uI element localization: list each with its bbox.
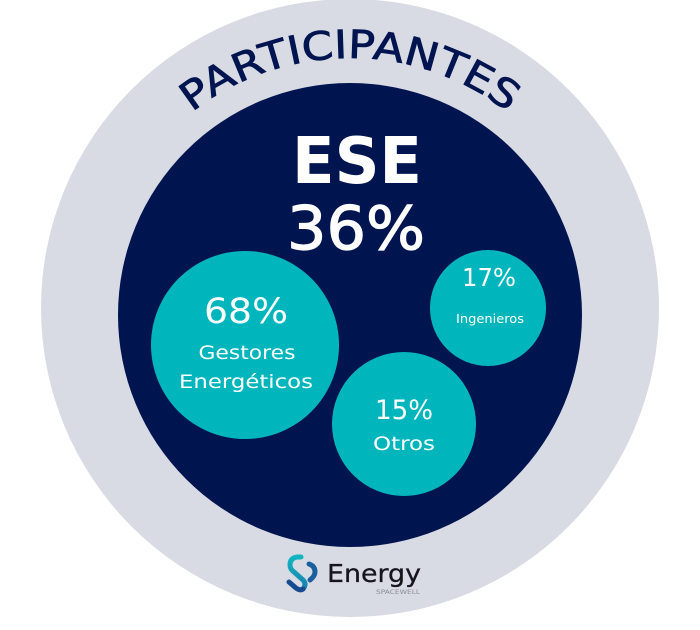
bubble: ingenieros — [430, 250, 546, 366]
value: 68%: 68% — [204, 292, 288, 332]
bubble: otros — [332, 352, 476, 496]
icon: logo links — [289, 557, 315, 590]
wordmark: Energy: Energy — [327, 559, 421, 588]
logo — [289, 557, 421, 596]
label: otros: Otros — [373, 433, 435, 455]
wordmark: Spacewell: SPACEWELL — [376, 589, 421, 596]
inner circle — [118, 83, 582, 547]
heading: 36%: 36% — [287, 194, 425, 264]
label: gestores: Gestores — [198, 342, 296, 364]
heading: ESE: ESE — [292, 125, 422, 199]
curved title: PARTICIPANTES — [178, 29, 521, 110]
bubble: gestores energeticos — [151, 251, 339, 439]
label: energeticos: Energéticos — [179, 371, 313, 393]
label: ingenieros: Ingenieros — [456, 312, 524, 326]
value: 17%: 17% — [462, 263, 516, 292]
value: 15%: 15% — [375, 395, 433, 426]
